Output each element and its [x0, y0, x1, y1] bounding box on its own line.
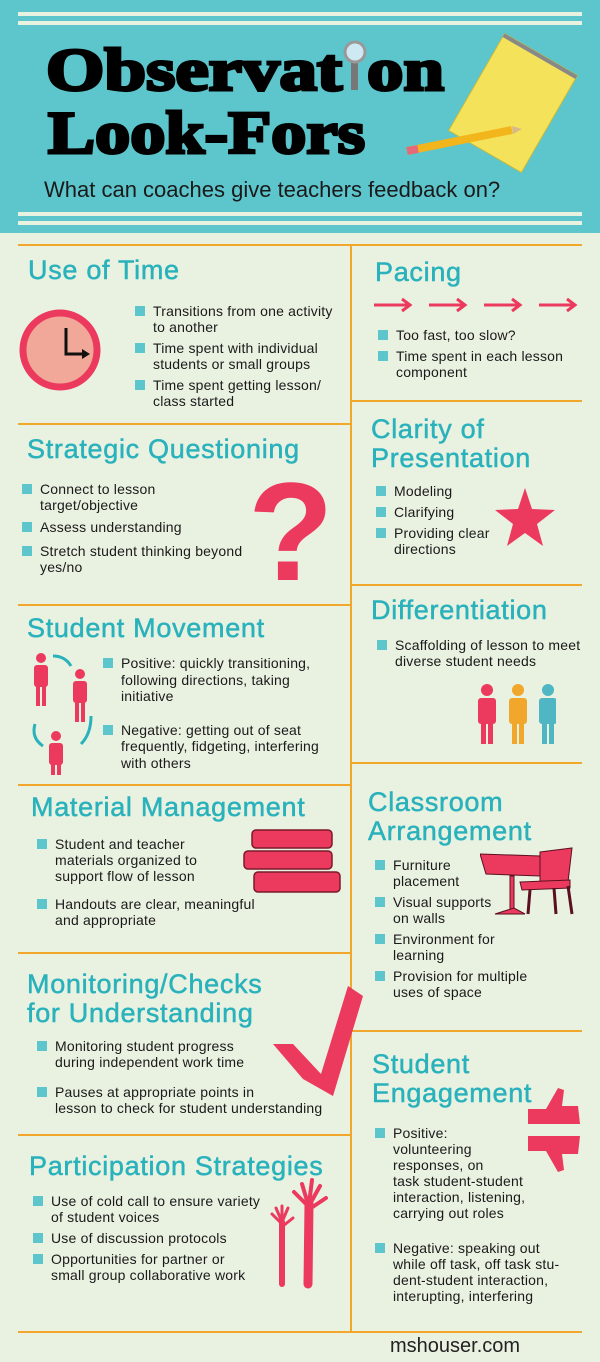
bullets: Monitoring student progress: [55, 1038, 234, 1054]
icon: star: [495, 488, 555, 546]
panel: differentiation: [371, 595, 580, 744]
panel: use of time: [20, 255, 333, 409]
bullets: [135, 303, 333, 409]
bullets: [376, 483, 490, 557]
bullets: Opportunities for partner or: [51, 1251, 225, 1267]
panel: student movement: [27, 613, 319, 775]
panel: strategic questioning: [22, 434, 334, 610]
bullets: following directions, taking: [121, 672, 290, 688]
bullets: interaction, listening,: [393, 1189, 525, 1205]
bullets: [375, 1125, 559, 1304]
heading: [371, 414, 531, 473]
heading: Arrangement: [368, 816, 532, 846]
bullets: Clarifying: [394, 504, 454, 520]
bullets: Assess understanding: [40, 519, 182, 535]
bullets: [33, 1193, 260, 1283]
heading: for Understanding: [27, 998, 254, 1028]
heading: [372, 1049, 532, 1108]
icon: clock: [20, 310, 100, 390]
bullets: and appropriate: [55, 912, 156, 928]
bullets: materials organized to: [55, 852, 197, 868]
bullets: class started: [153, 393, 234, 409]
bullets: Providing clear: [394, 525, 490, 541]
icon: magnifier: [345, 42, 365, 90]
heading: Participation Strategies: [29, 1151, 323, 1181]
bullets: support flow of lesson: [55, 868, 195, 884]
panel: student engagement: [372, 1049, 580, 1304]
heading: Student Movement: [27, 613, 265, 643]
bullets: Scaffolding of lesson to meet: [395, 637, 580, 653]
grid lines: [18, 244, 582, 246]
icon: books: [243, 829, 341, 893]
bullets: students or small groups: [153, 356, 310, 372]
title: on: [367, 37, 444, 103]
subtitle: What can coaches give teachers feedback on?: [44, 177, 500, 202]
heading: Strategic Questioning: [27, 434, 300, 464]
bullets: responses, on: [393, 1157, 484, 1173]
bullets: yes/no: [40, 559, 82, 575]
icon: raised hands: [270, 1178, 328, 1288]
bullets: Too fast, too slow?: [396, 327, 516, 343]
icon: three students: [478, 684, 556, 744]
bullets: of student voices: [51, 1209, 159, 1225]
bullets: to another: [153, 319, 218, 335]
bullets: small group collaborative work: [51, 1267, 245, 1283]
bullets: Time spent getting lesson/: [153, 377, 321, 393]
bullets: Time spent in each lesson: [396, 348, 563, 364]
bullets: carrying out roles: [393, 1205, 504, 1221]
heading: Presentation: [371, 443, 531, 473]
heading: Classroom: [368, 787, 503, 817]
heading: Engagement: [372, 1078, 532, 1108]
bullets: Student and teacher: [55, 836, 185, 852]
bullets: [375, 857, 527, 1000]
bullets: Time spent with individual: [153, 340, 318, 356]
panel: material management: [31, 792, 341, 928]
bullets: Stretch student thinking beyond: [40, 543, 242, 559]
bullets: with others: [121, 754, 191, 770]
bullets: learning: [393, 947, 444, 963]
bullets: [37, 1038, 322, 1116]
icon: check mark: [273, 986, 363, 1096]
bullets: [378, 327, 563, 380]
title: [46, 37, 445, 166]
title: Observat: [46, 37, 342, 103]
bullets: Pauses at appropriate points in: [55, 1084, 254, 1100]
bullets: Environment for: [393, 931, 495, 947]
heading: Clarity of: [371, 414, 485, 444]
bullets: task student-student: [393, 1173, 523, 1189]
bullets: Provision for multiple: [393, 968, 527, 984]
heading: [27, 969, 262, 1028]
bullets: while off task, off task stu-: [393, 1256, 559, 1272]
bullets: [377, 637, 580, 669]
bullets: Modeling: [394, 483, 452, 499]
bullets: Connect to lesson: [40, 481, 155, 497]
bullets: [22, 481, 242, 575]
icon: notepad and pencil: [406, 33, 578, 173]
heading: Use of Time: [28, 255, 180, 285]
bullets: Furniture: [393, 857, 451, 873]
heading: Student: [372, 1049, 470, 1079]
bullets: dent-student interaction,: [393, 1272, 548, 1288]
footer: mshouser.com: [390, 1335, 520, 1357]
icon: desk: [480, 847, 574, 914]
panel: pacing: [374, 257, 578, 380]
bullets: diverse student needs: [395, 653, 536, 669]
bullets: Negative: getting out of seat: [121, 722, 301, 738]
header band: [0, 0, 600, 233]
heading: Material Management: [31, 792, 305, 822]
bullets: placement: [393, 873, 459, 889]
heading: [368, 787, 532, 846]
title: Look-Fors: [48, 100, 365, 166]
heading: Differentiation: [371, 595, 548, 625]
icon: arrows: [374, 298, 578, 312]
bullets: Handouts are clear, meaningful: [55, 896, 255, 912]
heading: Monitoring/Checks: [27, 969, 262, 999]
panel: monitoring: [27, 969, 363, 1116]
bullets: directions: [394, 541, 456, 557]
bullets: Positive: quickly transitioning,: [121, 655, 310, 671]
bullets: [37, 836, 255, 928]
icon: question mark: ?: [248, 453, 334, 610]
bullets: uses of space: [393, 984, 482, 1000]
bullets: on walls: [393, 910, 445, 926]
icon: moving students: [32, 653, 92, 775]
bullets: Negative: speaking out: [393, 1240, 540, 1256]
bullets: Transitions from one activity: [153, 303, 333, 319]
bullets: [103, 655, 319, 770]
bullets: initiative: [121, 688, 174, 704]
panel: participation: [29, 1151, 328, 1288]
bullets: target/objective: [40, 497, 138, 513]
bullets: Use of cold call to ensure variety: [51, 1193, 260, 1209]
panel: classroom arrangement: [368, 787, 574, 1000]
bullets: component: [396, 364, 467, 380]
heading: Pacing: [375, 257, 462, 287]
bullets: frequently, fidgeting, interfering: [121, 738, 319, 754]
bullets: lesson to check for student understanding: [55, 1100, 322, 1116]
panel: clarity: [371, 414, 555, 557]
bullets: Positive:: [393, 1125, 448, 1141]
bullets: during independent work time: [55, 1054, 244, 1070]
bullets: interupting, interfering: [393, 1288, 533, 1304]
bullets: volunteering: [393, 1141, 472, 1157]
bullets: Visual supports: [393, 894, 491, 910]
icon: thumbs: [528, 1088, 580, 1172]
bullets: Use of discussion protocols: [51, 1230, 227, 1246]
